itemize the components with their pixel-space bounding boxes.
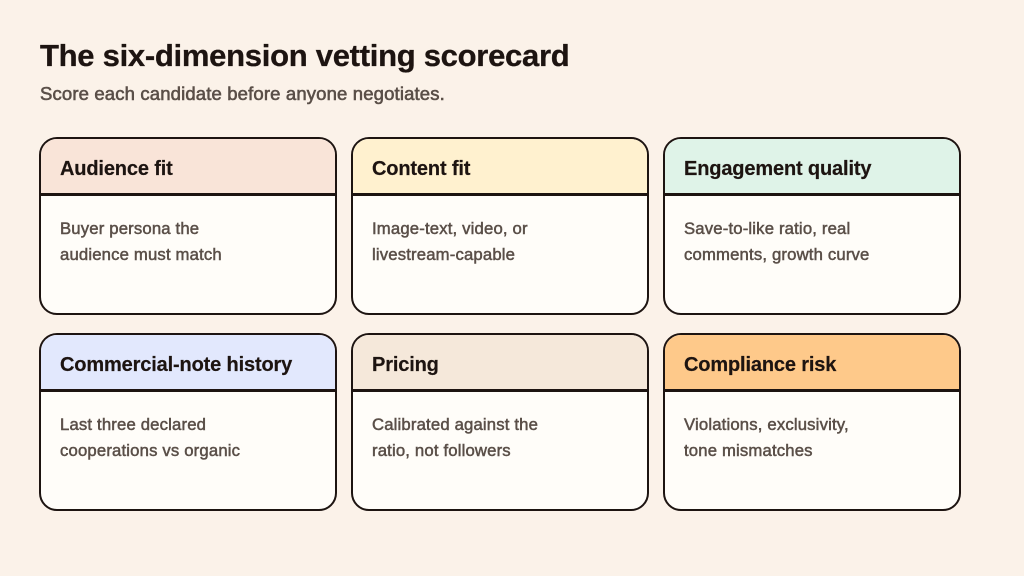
text: compliance risk description: tone mismatches	[684, 441, 813, 460]
text: engagement quality description: Save-to-like ratio, real	[684, 219, 850, 238]
text: content fit description: Image-text, video, or	[372, 219, 528, 238]
heading: compliance risk: Compliance risk	[684, 354, 836, 376]
title: The six-dimension vetting scorecard	[40, 38, 569, 73]
text: commercial-note history description: cooperations vs organic	[60, 441, 240, 460]
text: compliance risk description: Violations, exclusivity,	[684, 415, 849, 434]
panel: audience fit	[39, 137, 337, 315]
text: pricing description: ratio, not followers	[372, 441, 511, 460]
panel: pricing	[351, 333, 649, 511]
heading: content fit	[353, 139, 647, 196]
heading: pricing	[353, 335, 647, 392]
text: content fit description	[372, 219, 528, 264]
panel: engagement quality	[663, 137, 961, 315]
panel: compliance risk	[663, 333, 961, 511]
text: pricing description: Calibrated against the	[372, 415, 538, 434]
heading: pricing: Pricing	[372, 354, 439, 376]
text: pricing description	[372, 415, 538, 460]
text: content fit description: livestream-capable	[372, 245, 515, 264]
text: audience fit description	[60, 219, 222, 264]
panel: commercial-note history	[39, 333, 337, 511]
heading: audience fit: Audience fit	[60, 158, 173, 180]
text: compliance risk description	[684, 415, 849, 460]
text: commercial-note history description	[60, 415, 240, 460]
text: audience fit description: Buyer persona the	[60, 219, 199, 238]
heading: commercial-note history	[41, 335, 335, 392]
heading: engagement quality	[665, 139, 959, 196]
text: audience fit description: audience must match	[60, 245, 222, 264]
heading: commercial-note history: Commercial-note history	[60, 354, 292, 376]
heading: compliance risk	[665, 335, 959, 392]
text: commercial-note history description: Last three declared	[60, 415, 206, 434]
panel: content fit	[351, 137, 649, 315]
subtitle: Score each candidate before anyone negotiates.	[40, 83, 445, 104]
heading: content fit: Content fit	[372, 158, 470, 180]
text: engagement quality description	[684, 219, 870, 264]
heading: audience fit	[41, 139, 335, 196]
text: engagement quality description: comments, growth curve	[684, 245, 870, 264]
heading: engagement quality: Engagement quality	[684, 158, 871, 180]
